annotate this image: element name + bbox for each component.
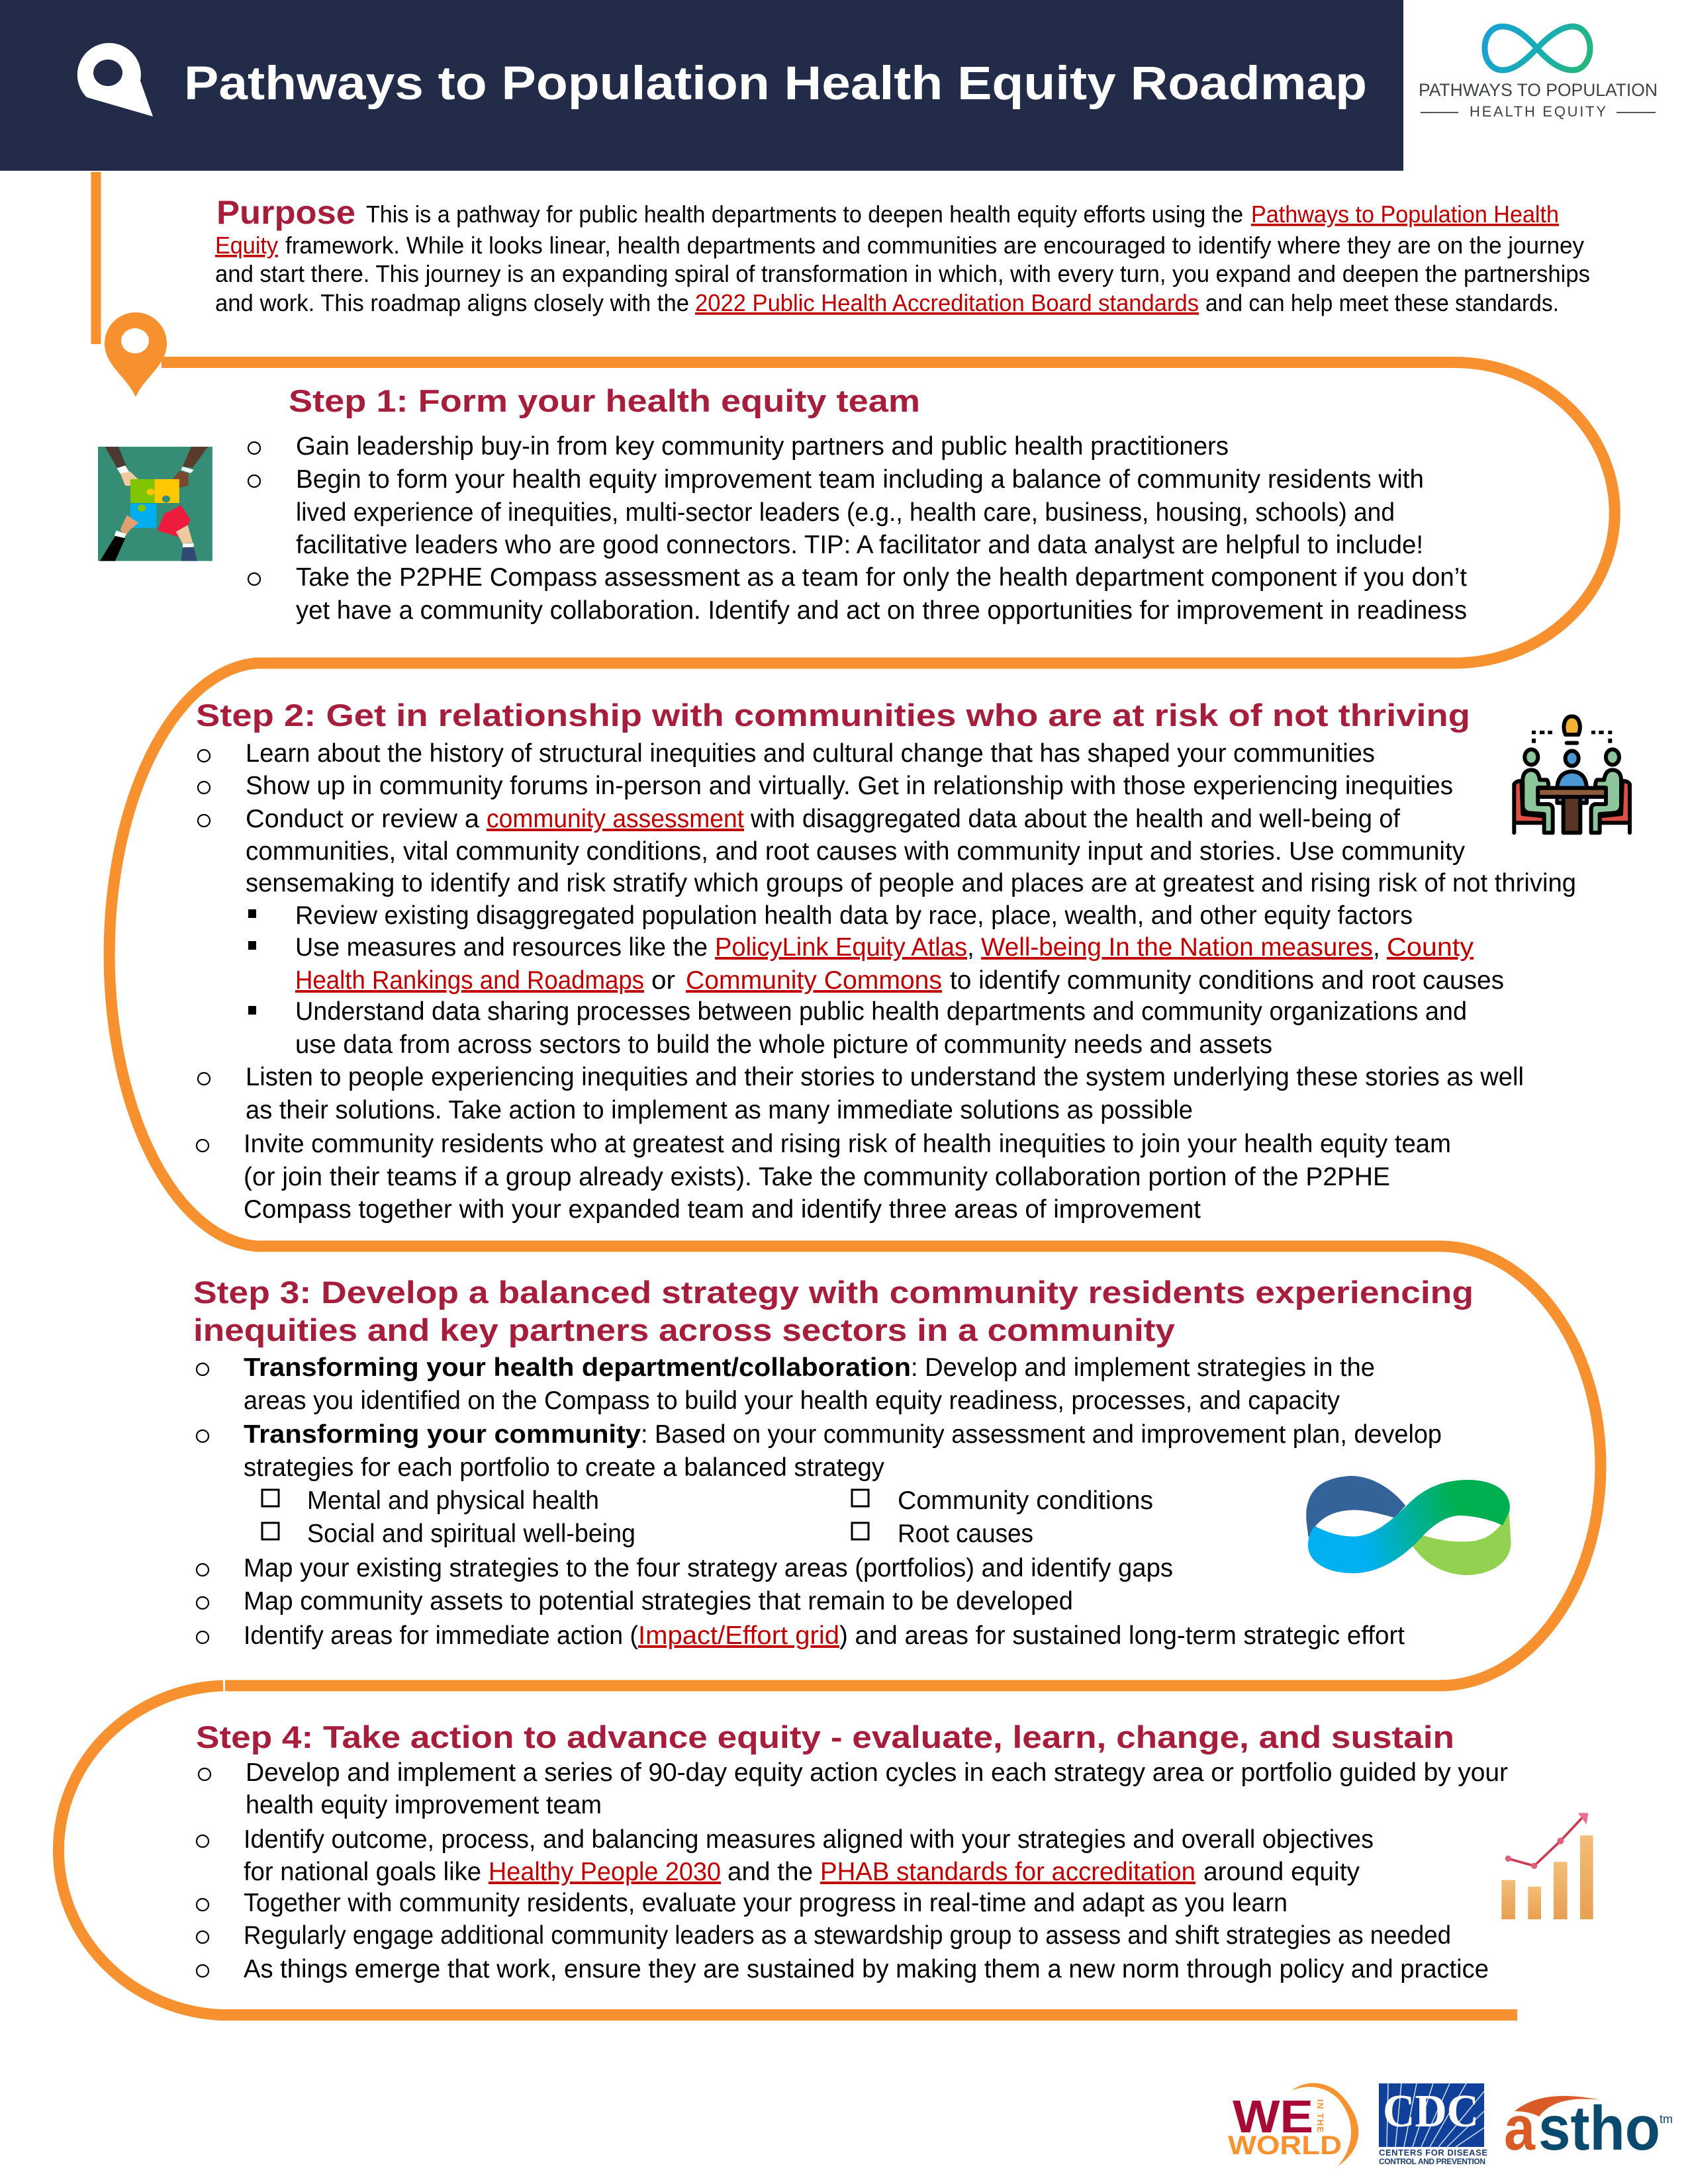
list: step 3 actions: ) and areas for sustained long-term strategic effort: [839, 1621, 1405, 1650]
list: step 3 actions: Impact/Effort grid: [638, 1621, 839, 1650]
text block: purpose description: and can help meet these standards.: [1205, 289, 1559, 316]
list: step 3 actions: strategies for each portfolio to create a balanced strategy: [244, 1453, 884, 1482]
icon: rising bar chart: [1501, 1813, 1593, 1919]
logo: CDC: CDC: [1383, 2086, 1479, 2137]
list: step 2 actions: with disaggregated data about the health and well-being of: [750, 805, 1400, 833]
list: step 4 actions: around equity: [1203, 1858, 1360, 1886]
list: step 2 actions: Review existing disaggregated population health data by race, place, wealth, and other equity factors: [295, 901, 1413, 930]
logo: Pathways to Population Health Equity: [1419, 26, 1658, 120]
list: step 3 actions: areas you identified on the Compass to build your health equity readiness, processes, and capacity: [244, 1387, 1340, 1415]
list: step 2 actions: (or join their teams if a group already exists). Take the community collaboration portion of the P2PHE: [244, 1163, 1390, 1191]
list: step 2 actions: PolicyLink Equity Atlas: [715, 933, 967, 962]
list: step 1 actions: [248, 432, 1467, 625]
icon: orange location pin: [105, 312, 167, 397]
list: step 3 actions: Map community assets to potential strategies that remain to be developed: [244, 1587, 1073, 1615]
list: step 4 actions: Together with community residents, evaluate your progress in real-time and adapt as you learn: [244, 1889, 1288, 1917]
list: step 2 actions: Understand data sharing processes between public health departments and community organizations and: [295, 997, 1467, 1026]
list: step 2 actions: Compass together with your expanded team and identify three areas of improvement: [244, 1195, 1201, 1224]
logo: CDC: CONTROL AND PREVENTION: [1379, 2157, 1485, 2166]
list: step 4 actions: Healthy People 2030: [489, 1858, 721, 1886]
icon: white map pin: [77, 43, 153, 116]
list: step 2 actions: ,: [967, 933, 974, 962]
list: step 3 actions: Transforming your health department/collaboration: [244, 1353, 911, 1382]
checklist: portfolios: [262, 1486, 1153, 1548]
list: step 1 actions: lived experience of inequities, multi-sector leaders (e.g., health care, business, housing, schools) and: [296, 498, 1395, 527]
checklist: portfolios: Root causes: [898, 1520, 1033, 1548]
list: step 2 actions: sensemaking to identify and risk stratify which groups of people and places are at greatest and rising risk of not thriving: [246, 869, 1576, 897]
list: step 2 actions: Listen to people experiencing inequities and their stories to understand the system underlying these stories as well: [246, 1063, 1524, 1091]
text block: purpose description: This is a pathway for public health departments to deepen health equity efforts using the: [366, 201, 1243, 228]
arrow: journey path connecting all steps: [58, 172, 1615, 2015]
heading: step 3: [193, 1275, 1474, 1347]
text block: purpose description: Equity: [215, 232, 278, 259]
list: step 2 actions: or: [651, 966, 675, 995]
list: step 3 actions: : Based on your community assessment and improvement plan, develop: [641, 1420, 1442, 1449]
list: step 1 actions: yet have a community collaboration. Identify and act on three opportunities for improvement in readiness: [296, 596, 1467, 625]
list: step 2 actions: Show up in community forums in-person and virtually. Get in relationship with those experiencing inequities: [246, 772, 1453, 800]
checklist: portfolios: Mental and physical health: [307, 1486, 599, 1515]
list: step 4 actions: health equity improvement team: [246, 1791, 602, 1819]
list: step 2 actions: Health Rankings and Roadmaps: [295, 966, 644, 995]
list: step 2 actions: to identify community conditions and root causes: [950, 966, 1504, 995]
logo: We in the World: IN THE: [1315, 2099, 1325, 2132]
list: step 3 actions: Transforming your community: [244, 1420, 641, 1449]
list: step 3 actions: : Develop and implement strategies in the: [911, 1353, 1375, 1382]
list: step 4 actions: Regularly engage additional community leaders as a stewardship group to assess and shift strategies as needed: [244, 1921, 1451, 1950]
logo: ASTHO: tm: [1660, 2113, 1673, 2126]
heading: step 4: Step 4: Take action to advance equity - evaluate, learn, change, and sustain: [196, 1719, 1454, 1754]
list: step 4 actions: [197, 1758, 1508, 1983]
list: step 2 actions: use data from across sectors to build the whole picture of community needs and assets: [295, 1030, 1272, 1059]
list: step 4 actions: As things emerge that work, ensure they are sustained by making them a new norm through policy and practice: [244, 1955, 1489, 1983]
checklist: portfolios: Community conditions: [898, 1486, 1153, 1515]
heading: step 3: Step 3: Develop a balanced strategy with community residents experiencing: [193, 1275, 1474, 1310]
logo: We in the World: WORLD: [1228, 2131, 1342, 2160]
panel: step 4: [196, 1719, 1593, 1983]
text block: purpose description: framework. While it looks linear, health departments and communities are encouraged to identify where they are on the journey: [285, 232, 1584, 259]
logo: We in the World: WE: [1233, 2091, 1313, 2142]
text block: purpose description: and work. This roadmap aligns closely with the: [215, 289, 689, 316]
list: step 1 actions: Gain leadership buy-in from key community partners and public health practitioners: [296, 432, 1229, 461]
list: step 2 actions: ,: [1373, 933, 1380, 962]
list: step 2 actions: Invite community residents who at greatest and rising risk of health inequities to join your health equity team: [244, 1130, 1451, 1158]
logo: CDC: [1379, 2083, 1487, 2166]
header banner: [0, 0, 1403, 171]
panel: step 1: [98, 383, 1467, 625]
list: step 2 actions: Community Commons: [686, 966, 942, 995]
icon: infinity ribbon: [1306, 1476, 1511, 1575]
list: step 2 actions: Conduct or review a: [246, 805, 479, 833]
logo: CDC: CENTERS FOR DISEASE: [1379, 2148, 1487, 2158]
list: step 2 actions: Well-being In the Nation measures: [981, 933, 1373, 962]
list: step 3 actions: Identify areas for immediate action (: [244, 1621, 638, 1650]
logo: ASTHO: stho: [1538, 2093, 1660, 2163]
text block: purpose description: 2022 Public Health Accreditation Board standards: [695, 289, 1199, 316]
logo: Pathways to Population Health Equity: HEALTH EQUITY: [1470, 103, 1606, 120]
list: step 4 actions: Develop and implement a series of 90-day equity action cycles in each strategy area or portfolio guided by your: [246, 1758, 1508, 1787]
list: step 4 actions: and the: [727, 1858, 813, 1886]
panel: step 2: [196, 698, 1630, 1224]
title: Pathways to Population Health Equity Roadmap: [184, 58, 1367, 110]
heading: purpose: Purpose: [216, 194, 355, 231]
list: step 2 actions: County: [1387, 933, 1474, 962]
heading: step 1: Step 1: Form your health equity team: [289, 383, 920, 418]
list: step 2 actions: communities, vital community conditions, and root causes with community input and stories. Use community: [246, 837, 1465, 866]
logo: Pathways to Population Health Equity: PATHWAYS TO POPULATION: [1419, 80, 1658, 100]
logo: ASTHO: a: [1504, 2093, 1536, 2163]
list: step 3 actions: Map your existing strategies to the four strategy areas (portfolios) and identify gaps: [244, 1554, 1173, 1582]
text block: purpose description: [215, 201, 1590, 316]
list: step 2 actions: Use measures and resources like the: [295, 933, 708, 962]
logo: We in the World: [1228, 2083, 1358, 2166]
list: step 2 actions: community assessment: [487, 805, 744, 833]
list: step 1 actions: facilitative leaders who are good connectors. TIP: A facilitator and data analyst are helpful to include!: [296, 531, 1423, 559]
icon: puzzle hands: [98, 447, 212, 561]
icon: team meeting at table: [1514, 716, 1630, 833]
list: step 3 actions: [197, 1353, 1442, 1650]
panel: purpose: [215, 194, 1590, 316]
text block: purpose description: and start there. This journey is an expanding spiral of transformation in which, with every turn, you expand and deepen the partnerships: [215, 260, 1590, 287]
list: step 2 actions: as their solutions. Take action to implement as many immediate solutions as possible: [246, 1096, 1193, 1124]
list: step 4 actions: for national goals like: [244, 1858, 481, 1886]
heading: step 2: Step 2: Get in relationship with communities who are at risk of not thriving: [196, 698, 1470, 733]
text block: purpose description: Pathways to Population Health: [1251, 201, 1559, 228]
list: step 1 actions: Begin to form your health equity improvement team including a balance of community residents with: [296, 465, 1424, 494]
list: step 4 actions: Identify outcome, process, and balancing measures aligned with your strategies and overall objectives: [244, 1825, 1374, 1854]
list: step 1 actions: Take the P2PHE Compass assessment as a team for only the health department component if you don’t: [296, 563, 1467, 592]
heading: step 3: inequities and key partners across sectors in a community: [193, 1312, 1175, 1347]
list: step 4 actions: PHAB standards for accreditation: [820, 1858, 1196, 1886]
list: step 2 actions: Learn about the history of structural inequities and cultural change that has shaped your communities: [246, 739, 1375, 768]
checklist: portfolios: Social and spiritual well-being: [307, 1520, 635, 1548]
list: step 2 actions: [197, 739, 1576, 1224]
panel: step 3: [193, 1275, 1511, 1650]
